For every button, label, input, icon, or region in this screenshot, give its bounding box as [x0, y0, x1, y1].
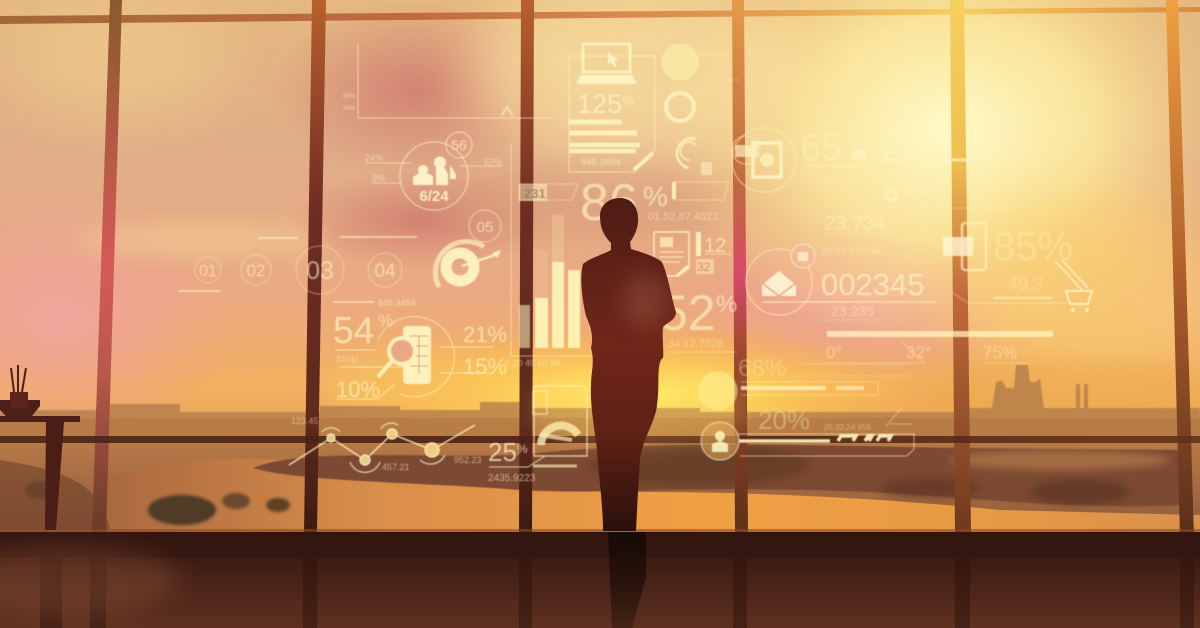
small circles top centre [662, 44, 740, 175]
woman silhouette [581, 198, 676, 531]
86% readout: 86 [580, 174, 638, 232]
25% with chip icon: 2435.9223 [488, 473, 536, 484]
25% with chip icon: 25 [488, 437, 517, 467]
bar chart panel: 231 [524, 186, 546, 201]
numbered circles 01-04 [178, 237, 417, 294]
progress bars 68% and 20%: 20% [758, 405, 810, 435]
phone search panel [333, 298, 507, 402]
people counter 6/24: 9% [372, 173, 385, 183]
86% readout [580, 174, 728, 232]
mail panel with counter: 23.235 [831, 303, 874, 319]
52% readout [660, 285, 737, 352]
phone search panel: 21% [463, 322, 507, 347]
people counter 6/24: 24% [365, 153, 383, 163]
document with laptop panel [569, 44, 655, 172]
people counter 6/24 [365, 132, 502, 210]
phone search panel: % [378, 311, 393, 330]
long bar with degree labels: 32° [906, 343, 932, 362]
52% readout: 52 [660, 285, 716, 341]
line chart upper left [343, 44, 550, 118]
network line chart: 123.45 [291, 416, 319, 426]
document with laptop panel: % [622, 93, 634, 108]
52% readout: % [716, 291, 737, 318]
phone search panel: 15% [463, 354, 507, 379]
network line chart: 952.23 [454, 455, 482, 465]
86% readout: % [643, 181, 668, 212]
86% readout: 01.52.87.4522 [648, 211, 718, 223]
progress bars 68% and 20% [699, 355, 914, 460]
floor with reflections [0, 532, 1200, 628]
bar chart panel: 0 20 40 60 80 [505, 358, 560, 368]
phone and 85% with cart [943, 223, 1092, 312]
bar chart panel [505, 144, 600, 368]
long bar with degree labels: 75% [983, 343, 1017, 362]
phone search panel: 945.3454 [378, 298, 416, 308]
network line chart [289, 416, 482, 472]
phone search panel: 23342 [336, 355, 359, 364]
small news card: 12 [704, 235, 726, 257]
25% with chip icon: % [517, 442, 528, 456]
phone and 85% with cart: 85% [993, 225, 1073, 269]
river and banks [0, 440, 1200, 535]
phone search panel: 10% [336, 377, 380, 402]
numbered circles 01-04: 02 [247, 261, 265, 280]
52% readout: 34.12.7528 [668, 338, 723, 350]
long bar with degree labels [826, 331, 1053, 363]
phone search panel: 54 [333, 310, 374, 351]
photo circle and 65: 223.0091 [808, 174, 850, 185]
numbered circles 01-04: 01 [199, 263, 217, 280]
progress bars 68% and 20%: 68% [738, 355, 786, 382]
document with laptop panel: 945.3454 [581, 157, 621, 168]
long bar with degree labels: 0° [826, 343, 842, 362]
small news card: 32 [697, 260, 711, 274]
photo circle and 65: 65 [800, 127, 842, 169]
target icon with 05 badge: 05 [477, 219, 493, 236]
lens flare glow [0, 375, 750, 615]
25% with chip icon [488, 386, 587, 484]
mail panel with counter: 002345 [821, 267, 924, 302]
mail panel with counter: 25.92.24.958 [821, 246, 880, 257]
numbered circles 01-04: 03 [306, 257, 334, 285]
numbered circles 01-04: 04 [374, 261, 396, 282]
HUD overlay: data graphics [178, 44, 1092, 484]
people counter 6/24: 67% [484, 157, 502, 167]
stripes and gear: 91 [900, 171, 929, 201]
stripes and gear [883, 135, 1015, 208]
small news card [654, 232, 731, 276]
line chart upper left: 60% [343, 94, 356, 100]
line chart upper left: 20% [343, 106, 356, 112]
document with laptop panel: 125 [577, 89, 622, 119]
progress bars 68% and 20%: 25.02.24.958 [824, 423, 871, 432]
table with plant at left [0, 365, 80, 530]
photo circle and 65 [732, 127, 866, 192]
people counter 6/24: 6/24 [419, 188, 449, 205]
23.734 label: 23.734 [824, 213, 885, 235]
mail panel with counter [746, 244, 936, 320]
target icon with 05 badge [435, 210, 501, 287]
distant city skyline [0, 365, 1200, 442]
phone and 85% with cart: 49.3 [1008, 274, 1043, 294]
network line chart: 457.21 [382, 462, 410, 472]
people counter 6/24: 56 [451, 137, 467, 153]
